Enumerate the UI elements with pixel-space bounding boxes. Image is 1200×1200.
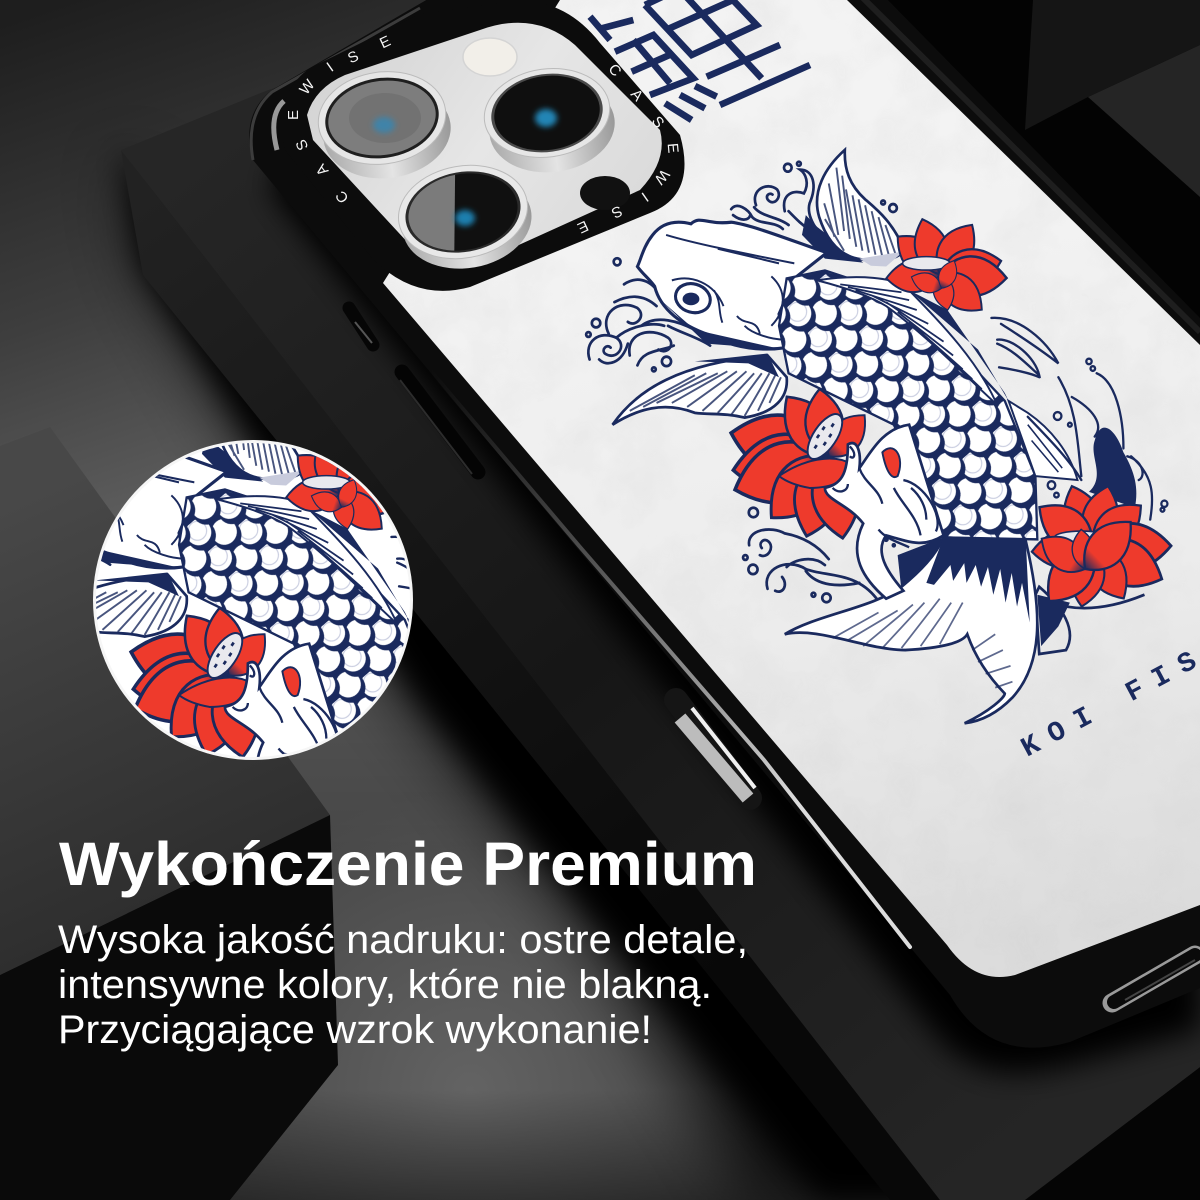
heading: Wykończenie Premium — [59, 830, 757, 898]
top waves and bubbles — [731, 162, 897, 245]
ring lettering: S — [345, 48, 361, 67]
description: Wysoka jakość nadruku: ostre detale, — [58, 918, 748, 962]
description — [58, 918, 748, 1052]
circular detail inset — [93, 440, 413, 760]
camera island — [274, 1, 685, 291]
ring lettering: I — [638, 188, 651, 205]
lens bottom — [398, 164, 532, 269]
lower-left waves — [743, 508, 877, 602]
phone case — [249, 0, 1200, 1073]
ring lettering: A — [627, 86, 646, 105]
ring lettering: E — [285, 110, 302, 120]
ring lettering: C — [332, 187, 352, 206]
right water splash — [991, 318, 1167, 520]
flash — [463, 38, 517, 76]
ring lettering: E — [575, 217, 591, 236]
water foam over flower — [825, 425, 944, 599]
edge highlight — [430, 370, 910, 947]
ring lettering: W — [296, 76, 319, 98]
pectoral fin — [613, 354, 787, 425]
sensor hole — [580, 176, 630, 210]
side button — [676, 700, 755, 798]
camera glass — [307, 23, 662, 264]
print surface — [383, 0, 1200, 977]
lotus flower: top — [885, 214, 1008, 322]
lens top-left — [312, 64, 457, 186]
volume buttons — [349, 308, 478, 474]
lotus flower: right — [1028, 480, 1171, 614]
ring lettering: A — [313, 161, 332, 179]
ring lettering: S — [609, 202, 625, 221]
description: intensywne kolory, które nie blakną. — [58, 963, 712, 1007]
lotus flower: lower — [725, 384, 876, 543]
camera ring — [282, 1, 685, 291]
charging port — [1112, 955, 1195, 1003]
ring lettering: S — [648, 113, 667, 131]
lens top-right — [478, 61, 621, 180]
left waves — [586, 258, 710, 371]
ring lettering: W — [650, 166, 673, 188]
description: Przyciągające wzrok wykonanie! — [58, 1008, 652, 1052]
kanji print on case — [590, 0, 810, 120]
dorsal fin — [817, 150, 905, 267]
island side strip — [274, 101, 284, 150]
scale pattern body — [779, 270, 1037, 539]
ring lettering: S — [293, 137, 312, 153]
head — [637, 220, 827, 350]
back feather stripe — [817, 277, 1078, 480]
eye — [672, 280, 713, 317]
tail — [785, 537, 1144, 723]
ring lettering — [285, 33, 681, 236]
navy wake behind fin — [802, 215, 863, 263]
ring lettering: I — [324, 59, 337, 76]
ring lettering: E — [664, 142, 681, 154]
ring lettering: E — [377, 33, 393, 52]
koi fish illustration — [586, 150, 1171, 723]
ring lettering: C — [605, 61, 625, 80]
paper texture — [380, 0, 1200, 990]
